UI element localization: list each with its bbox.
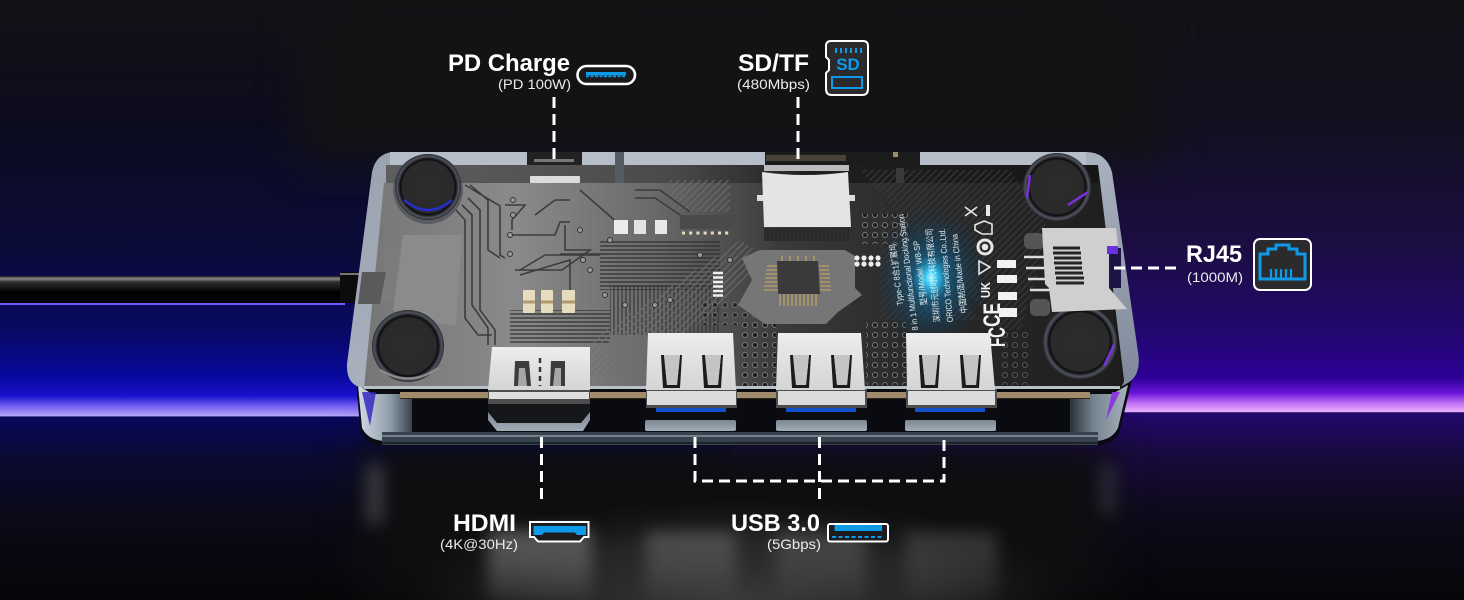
- icon: RJ45 socket: [1254, 239, 1311, 290]
- USB 3.0 port left: [645, 333, 737, 431]
- device: docking station: [347, 152, 1139, 445]
- label: HDMI: [440, 510, 518, 552]
- dashed leader: USB stem: [818, 437, 821, 502]
- certification marks: CE: [979, 303, 1006, 327]
- icon: HDMI port: [530, 522, 588, 542]
- floor: dark centre: [360, 445, 1110, 600]
- USB 3.0 port right: [905, 333, 998, 431]
- printed product text: 中国制造/Made in China: [949, 233, 969, 314]
- glow LED: [873, 206, 989, 350]
- rubber foot top left: [393, 154, 463, 224]
- label: HDMI: (4K@30Hz): [440, 536, 518, 552]
- plate front edge highlight: [364, 386, 1120, 389]
- label: SD/TF: SD/TF: [738, 50, 809, 77]
- label: USB 3.0: [731, 510, 821, 552]
- dashed leader: RJ45: [1114, 266, 1181, 270]
- printed product text: Type-C 8合1扩展坞: [888, 243, 905, 306]
- USB 3.0 port middle: [776, 333, 868, 431]
- certification marks: [978, 260, 1017, 347]
- regulatory icons: [965, 205, 992, 274]
- left trace bundles: [456, 185, 690, 345]
- circuit vias: [508, 198, 732, 308]
- background: dark top centre: [300, 0, 1160, 160]
- label: PD Charge: PD Charge: [448, 50, 570, 77]
- label: RJ45: (1000M): [1187, 269, 1243, 285]
- cable: [0, 272, 364, 305]
- circuit board: [364, 170, 1122, 389]
- floor: soft grey wash: [400, 490, 1080, 600]
- label: RJ45: RJ45: [1186, 241, 1242, 268]
- dashed leader: USB bracket: [695, 437, 944, 481]
- icon: SD card: [826, 41, 868, 95]
- printed product text: 型号/Model: W8-SP: [911, 240, 929, 306]
- dashed leader: HDMI: [540, 437, 543, 502]
- label: PD Charge: (PD 100W): [498, 76, 571, 92]
- background: left blue light wall: [0, 0, 732, 600]
- label: SD/TF: [737, 50, 810, 92]
- icon: USB-A port: [828, 524, 888, 542]
- rubber foot bottom right: [1043, 305, 1117, 379]
- printed product text: 8 in 1 Multifunctional Docking Station: [896, 213, 920, 331]
- icon: SD card: SD: [836, 55, 860, 74]
- printed product text: 深圳市元创时代科技有限公司: [924, 228, 942, 323]
- lower transparent body: [356, 380, 1132, 445]
- RJ45 port: [1024, 228, 1127, 316]
- label: HDMI: HDMI: [453, 510, 516, 537]
- certification marks: UK: [978, 281, 993, 298]
- label: SD/TF: (480Mbps): [737, 76, 810, 92]
- top band with port openings: [386, 152, 1098, 205]
- label: USB 3.0: (5Gbps): [767, 536, 821, 552]
- floor reflections of device: [366, 464, 1116, 600]
- rubber foot bottom left: [372, 310, 444, 382]
- background: right purple light wall: [732, 0, 1464, 600]
- label: RJ45: [1186, 241, 1243, 285]
- HDMI port: [488, 347, 590, 431]
- icon: USB-C port: [578, 66, 635, 84]
- fine trace patches: [510, 170, 1050, 388]
- label: USB 3.0: USB 3.0: [731, 510, 820, 537]
- printed product text: ORICO Technologies Co.,Ltd.: [937, 228, 955, 323]
- dashed leader: PD Charge: [552, 97, 556, 160]
- SD card slot: [757, 165, 855, 241]
- small components: [523, 176, 881, 313]
- acrylic top plate: [347, 152, 1139, 388]
- dashed leader: SD/TF: [796, 97, 800, 160]
- rubber foot top right: [1023, 153, 1091, 221]
- certification marks: FC: [984, 327, 1011, 347]
- label: PD Charge: [448, 50, 571, 92]
- cable connector block: [358, 235, 462, 325]
- interior window: [364, 165, 1124, 388]
- ground plane around chip: [738, 250, 862, 324]
- printed product text: [888, 213, 969, 331]
- controller chip: [764, 256, 831, 306]
